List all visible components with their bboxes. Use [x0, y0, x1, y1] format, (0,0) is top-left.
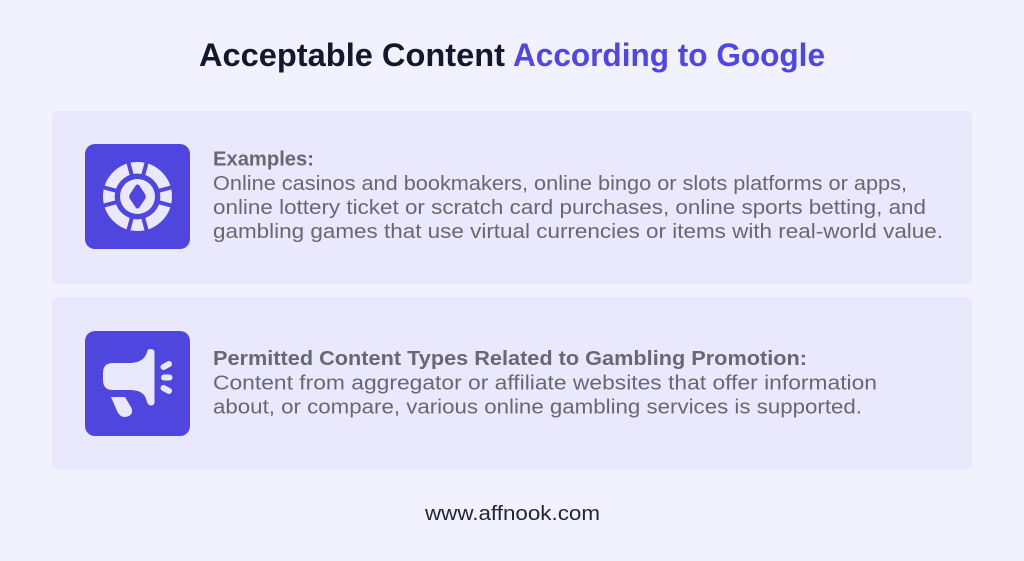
- text block: examples: gambling games that use virtual currencies or items with real-world value.: [213, 220, 943, 243]
- text block: examples: Online casinos and bookmakers, online bingo or slots platforms or apps,: [213, 172, 907, 195]
- text block: examples: [213, 148, 943, 243]
- icon: megaphone: [85, 331, 190, 436]
- icon: casino chip: [85, 144, 190, 249]
- title: [199, 37, 825, 73]
- title: According to Google: [513, 37, 825, 73]
- text block: permitted content: Permitted Content Types Related to Gambling Promotion:: [213, 347, 807, 370]
- text block: examples: Examples:: [213, 148, 314, 170]
- panel: examples: [52, 111, 972, 284]
- title: Acceptable Content: [199, 37, 505, 73]
- text block: permitted content: [213, 347, 877, 418]
- text block: permitted content: Content from aggregator or affiliate websites that offer information: [213, 372, 877, 394]
- footer url: www.affnook.com: [424, 503, 600, 525]
- panel: permitted content: [52, 297, 972, 470]
- text block: permitted content: about, or compare, various online gambling services is supported.: [213, 396, 862, 418]
- text block: examples: online lottery ticket or scratch card purchases, online sports betting, and: [213, 196, 926, 219]
